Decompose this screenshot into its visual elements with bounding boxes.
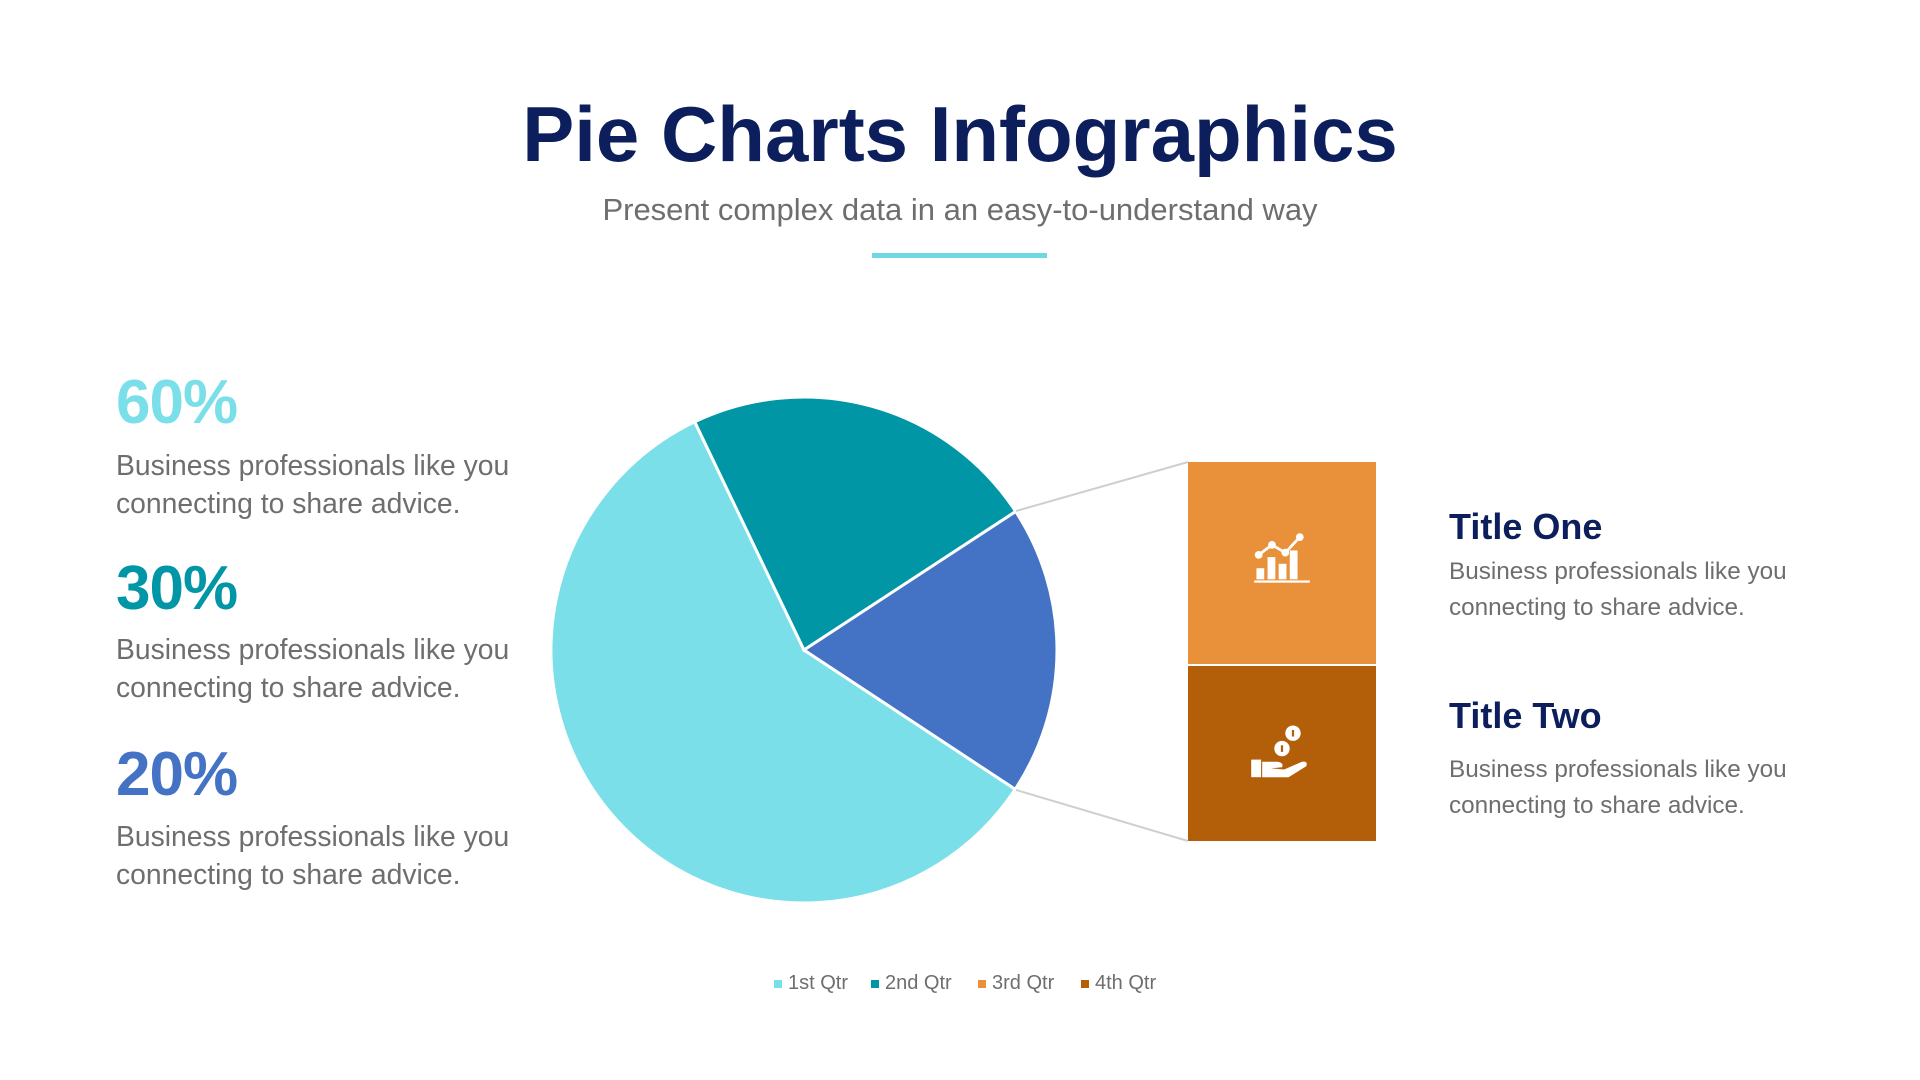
stat: 20%: 20% <box>116 740 237 809</box>
right text: Title Two <box>1449 695 1787 819</box>
right text: Title One <box>1449 506 1787 621</box>
legend <box>774 972 1156 994</box>
box: 3rd Qtr with chart icon <box>1188 462 1376 664</box>
right text: Title Two: connecting to share advice. <box>1449 792 1745 819</box>
stat: 30%: 30% <box>116 554 237 623</box>
stat: 60% <box>116 368 509 519</box>
stat: 30%: connecting to share advice. <box>116 671 460 703</box>
stat: 30% <box>116 554 509 703</box>
right text: Title Two: Title Two <box>1449 695 1602 736</box>
right text: Title One: Title One <box>1449 506 1602 547</box>
stat: 30%: Business professionals like you <box>116 633 509 665</box>
right text: Title One: connecting to share advice. <box>1449 594 1745 621</box>
icon: hand with coins <box>1251 726 1307 778</box>
right text: Title Two: Business professionals like you <box>1449 756 1787 783</box>
accent line <box>872 253 1047 258</box>
legend: 2nd Qtr <box>885 972 952 994</box>
legend: 3rd Qtr <box>992 972 1054 994</box>
right text: Title One: Business professionals like you <box>1449 558 1787 585</box>
legend: 4th Qtr <box>1095 972 1156 994</box>
stat: 60%: connecting to share advice. <box>116 487 460 519</box>
connector lines <box>1016 462 1188 841</box>
stat: 60%: 60% <box>116 368 237 437</box>
box: 4th Qtr with money icon <box>1188 666 1376 841</box>
stat: 60%: Business professionals like you <box>116 449 509 481</box>
icon: growth chart <box>1254 533 1310 583</box>
subtitle: Present complex data in an easy-to-understand way <box>602 192 1318 227</box>
stat: 20% <box>116 740 509 890</box>
title: Pie Charts Infographics <box>522 90 1398 178</box>
stat: 20%: connecting to share advice. <box>116 858 460 890</box>
legend: 1st Qtr <box>788 972 848 994</box>
stat: 20%: Business professionals like you <box>116 820 509 852</box>
